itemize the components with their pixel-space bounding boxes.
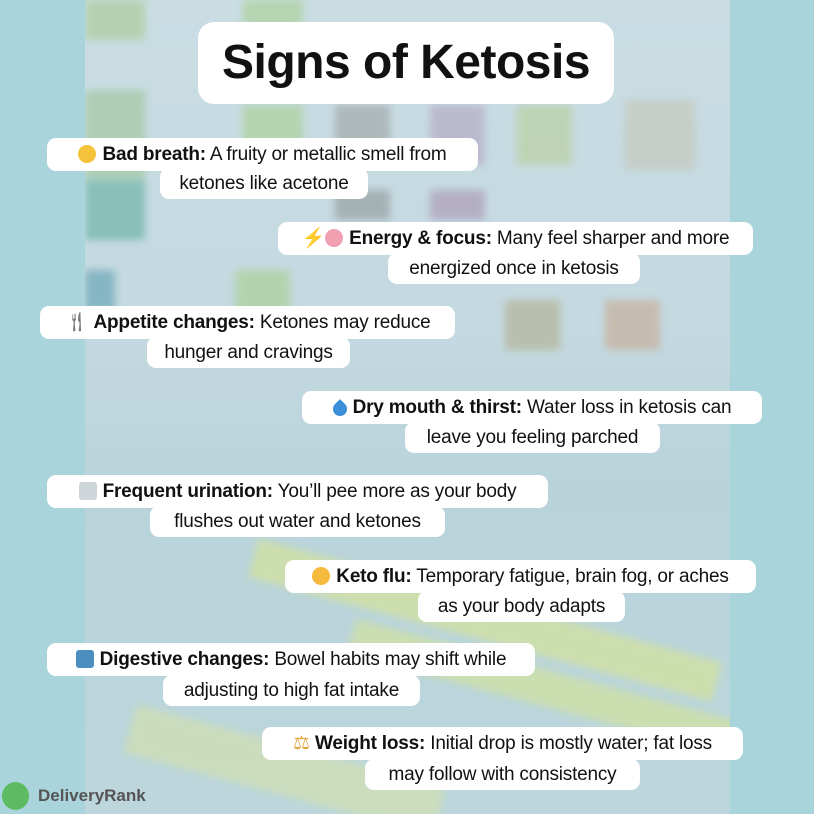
item: keto flu: as your body adapts (438, 596, 605, 617)
item: weight loss: ⚖ Weight loss: Initial drop is mostly water; fat loss (293, 733, 712, 754)
item: digestive changes: Digestive changes: Bowel habits may shift while (100, 649, 506, 670)
item: keto flu: Keto flu: Temporary fatigue, brain fog, or aches (336, 566, 729, 587)
item: energy & focus (278, 222, 753, 284)
title: Signs of Ketosis (222, 36, 590, 89)
item: dry mouth: leave you feeling parched (427, 427, 638, 448)
item: dry mouth: Dry mouth & thirst: Water loss in ketosis can (353, 397, 731, 418)
item: weight loss (262, 727, 743, 790)
item: dry mouth (302, 391, 762, 453)
item: keto flu (285, 560, 756, 622)
background photo of ketone test strips (85, 0, 730, 814)
item: digestive changes (47, 643, 535, 706)
item: digestive changes: adjusting to high fat intake (184, 680, 399, 701)
item: bad breath: ketones like acetone (179, 173, 349, 194)
item: appetite changes: 🍴︎ Appetite changes: Ketones may reduce (64, 312, 431, 333)
item: bad breath: Bad breath: A fruity or metallic smell from (102, 144, 447, 165)
title (198, 22, 614, 104)
item: frequent urination: Frequent urination: You’ll pee more as your body (103, 481, 516, 502)
item: appetite changes (40, 306, 455, 368)
item: appetite changes: hunger and cravings (164, 342, 333, 363)
item: energy & focus: ⚡ Energy & focus: Many feel sharper and more (302, 228, 729, 249)
item: bad breath (47, 138, 478, 199)
item: weight loss: may follow with consistency (389, 764, 616, 785)
item: energy & focus: energized once in ketosis (409, 258, 619, 279)
item: frequent urination: flushes out water and ketones (174, 511, 421, 532)
logo: DeliveryRank (2, 782, 146, 810)
item: frequent urination (47, 475, 548, 537)
logo: DeliveryRank: DeliveryRank (38, 786, 146, 805)
